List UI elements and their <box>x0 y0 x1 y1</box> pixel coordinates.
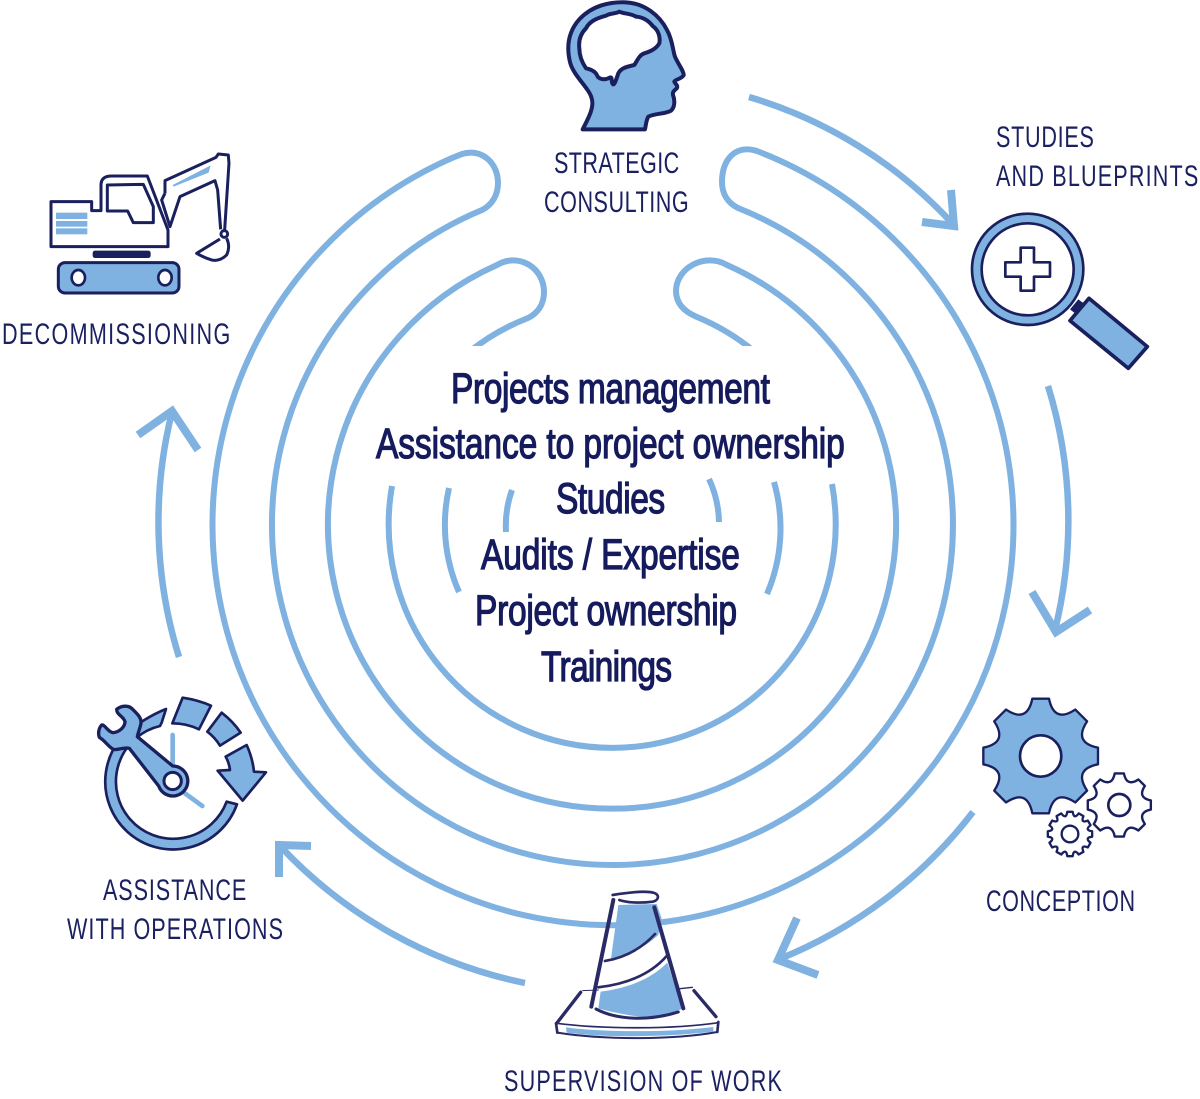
label: studies and blueprints <box>996 119 1198 193</box>
label: assistance with operations: ASSISTANCE <box>103 872 246 907</box>
label: studies and blueprints: AND BLUEPRINTS <box>996 158 1198 193</box>
center list of services <box>376 365 845 691</box>
center list of services: Projects management <box>451 365 770 413</box>
label: conception: CONCEPTION <box>986 883 1135 918</box>
label: strategic consulting <box>544 145 689 219</box>
center list of services: Assistance to project ownership <box>376 420 845 468</box>
label: strategic consulting: STRATEGIC <box>554 145 679 180</box>
arrow: supervision to assistance <box>279 845 525 983</box>
label: strategic consulting: CONSULTING <box>544 184 689 219</box>
arrow: consulting to studies <box>749 97 954 226</box>
icon: excavator <box>51 154 229 293</box>
center list of services: Audits / Expertise <box>481 531 740 579</box>
center list of services: Studies <box>556 475 665 523</box>
label: assistance with operations <box>67 872 283 946</box>
icon: gears <box>983 699 1151 856</box>
inner ring band <box>328 260 896 809</box>
label: assistance with operations: WITH OPERATIONS <box>67 911 283 946</box>
arrow: studies to conception <box>1032 386 1090 632</box>
icon: magnifying glass <box>972 214 1147 368</box>
label: supervision of work: SUPERVISION OF WORK <box>504 1063 782 1098</box>
label: decommissioning: DECOMMISSIONING <box>2 316 230 351</box>
icon: traffic cone <box>556 892 718 1038</box>
center list of services: Trainings <box>541 643 672 691</box>
outer ring band <box>212 149 1013 925</box>
center list of services: Project ownership <box>475 587 737 635</box>
arrow: assistance to decommissioning <box>138 411 198 657</box>
inner concentric arcs <box>389 479 836 748</box>
icon: wrench and dial <box>99 698 266 849</box>
arrow: conception to supervision <box>777 812 973 975</box>
label: studies and blueprints: STUDIES <box>996 119 1094 154</box>
icon: head with brain <box>568 2 684 129</box>
